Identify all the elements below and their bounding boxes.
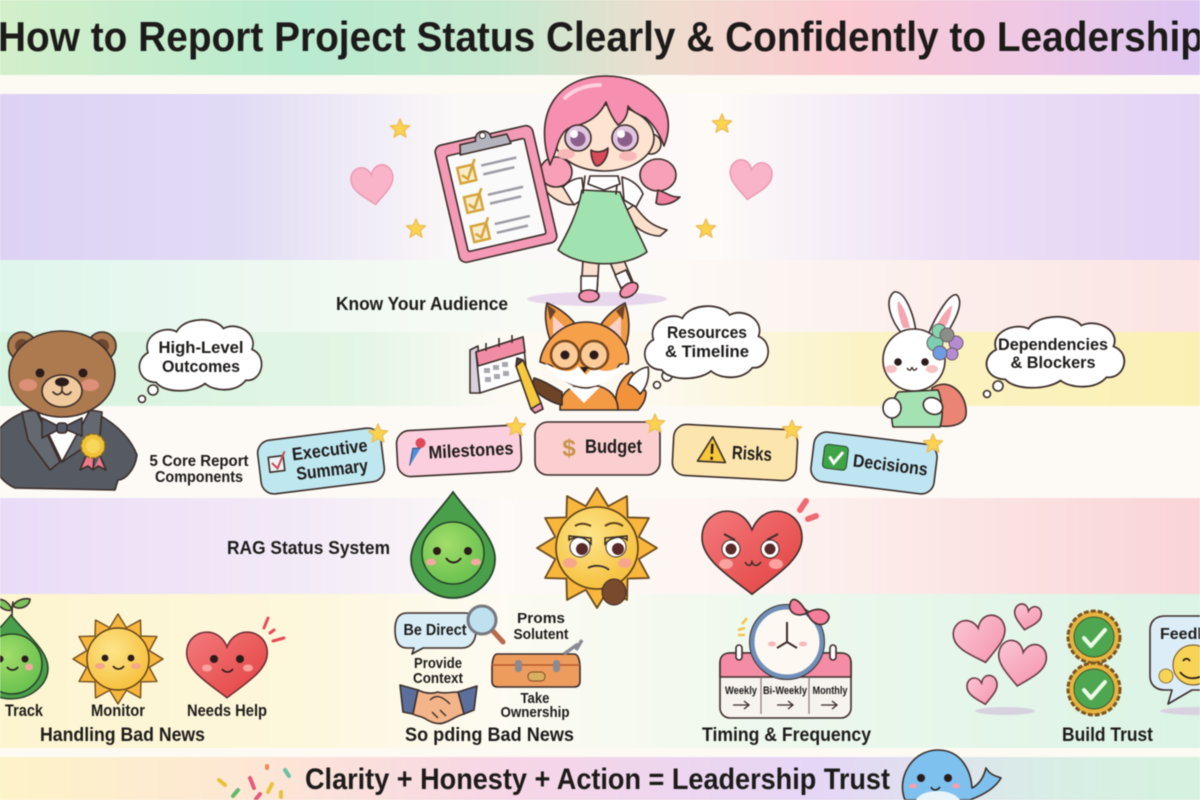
hand: [602, 579, 626, 605]
card: risks: Risks: [731, 443, 772, 466]
card: milestones: Milestones: [428, 438, 514, 463]
illustration: bunny with backpack: [883, 292, 966, 427]
text: take ownership: Take: [520, 690, 550, 707]
text: propose solution: Solutent: [514, 626, 568, 643]
label: know your audience: Know Your Audience: [336, 293, 508, 314]
thought cloud: high-level outcomes: High-Level: [158, 338, 244, 357]
thought cloud: resources and timeline: Resources: [667, 323, 747, 342]
card: budget: [535, 422, 660, 475]
text: take ownership: [500, 690, 570, 721]
text: take ownership: Ownership: [500, 704, 570, 721]
icon: handshake: [400, 685, 477, 724]
speech bubble: feedback: [1150, 616, 1200, 715]
label: 5 core report components: Components: [155, 469, 243, 486]
heading: So pding Bad News: [405, 725, 574, 746]
panel: timing and frequency: [702, 599, 871, 746]
thought cloud: resources and timeline: & Timeline: [665, 342, 749, 361]
label: 5 core report components: 5 Core Report: [150, 453, 249, 470]
card: executive summary: [256, 427, 386, 495]
clipboard with checklist: [433, 120, 558, 264]
icon: magnifier: [468, 606, 503, 642]
icon: warning triangle: [697, 436, 727, 463]
icon: briefcase: [492, 640, 582, 687]
thought cloud: dependencies and blockers: & Blockers: [1010, 353, 1096, 372]
decorative stars and hearts around the girl: [349, 114, 774, 237]
footer banner: [219, 750, 1001, 800]
icon: calendar with frequencies: Bi-Weekly: [763, 685, 808, 697]
text: propose solution: [514, 610, 568, 643]
illustration: bear in tuxedo: [0, 331, 137, 490]
pencil: [516, 358, 543, 413]
text: provide context: [413, 655, 463, 687]
icon: checkbox: [268, 451, 287, 472]
thought cloud: high-level outcomes: [138, 320, 262, 402]
icon: calendar with frequencies: [720, 645, 851, 718]
thought cloud: dependencies and blockers: Dependencies: [998, 335, 1108, 354]
icon: needs-help heart: [187, 618, 284, 698]
thought cloud: dependencies and blockers: [984, 317, 1124, 398]
icon: green drop: [411, 492, 495, 598]
label: 5 core report components: [150, 453, 249, 486]
text: provide context: Context: [413, 670, 463, 687]
icon: clock with bow: [738, 599, 829, 680]
heading: Build Trust: [1062, 725, 1154, 746]
icon: calendar with frequencies: Weekly: [725, 685, 758, 697]
calendar: [470, 335, 527, 393]
heading: Handling Bad News: [40, 725, 205, 746]
card: milestones: [396, 425, 522, 477]
text: propose solution: Proms: [517, 610, 565, 627]
icon: pin: [408, 438, 427, 466]
slogan: Clarity + Honesty + Action = Leadership Trust: [305, 763, 890, 796]
thought cloud: resources and timeline: [645, 306, 768, 388]
panel: delivering bad news: [395, 606, 582, 746]
label: track: Track: [5, 702, 44, 720]
label: RAG status system: RAG Status System: [227, 537, 390, 558]
flower: [927, 324, 963, 360]
illustration: fox with calendar: [470, 303, 649, 413]
icon: dollar sign: $: [562, 435, 576, 462]
card: decisions: [809, 431, 939, 495]
icon: frowning red heart: [702, 501, 816, 594]
speech bubble: be direct: Be Direct: [404, 622, 467, 639]
icon: calendar with frequencies: Monthly: [812, 685, 848, 697]
icon: green check: [822, 444, 849, 471]
thought cloud: high-level outcomes: Outcomes: [162, 357, 240, 376]
text: provide context: Provide: [414, 655, 462, 672]
label: monitor: Monitor: [91, 702, 146, 720]
label: needs help: Needs Help: [187, 702, 267, 720]
card: executive summary: Executive: [291, 435, 369, 464]
icon: whale: [902, 750, 1001, 800]
card: decisions: Decisions: [852, 451, 929, 480]
rosette badge: [80, 434, 106, 470]
confetti: [219, 766, 289, 799]
panel: build trust: [951, 603, 1200, 746]
speech bubble: be direct: [395, 613, 476, 654]
icon: hearts: [951, 603, 1049, 715]
icon: worried amber sun: [537, 488, 657, 608]
card: risks: [672, 424, 798, 481]
card: executive summary: Summary: [295, 455, 369, 484]
icon: check seals: [1068, 611, 1120, 715]
illustration: girl with clipboard: [349, 76, 774, 306]
panel: handling bad news: [0, 599, 284, 746]
heading: Timing & Frequency: [702, 725, 871, 746]
icon: on-track green drop: [0, 599, 48, 699]
card: budget: Budget: [585, 437, 643, 458]
icon: monitor sun: [73, 614, 163, 704]
